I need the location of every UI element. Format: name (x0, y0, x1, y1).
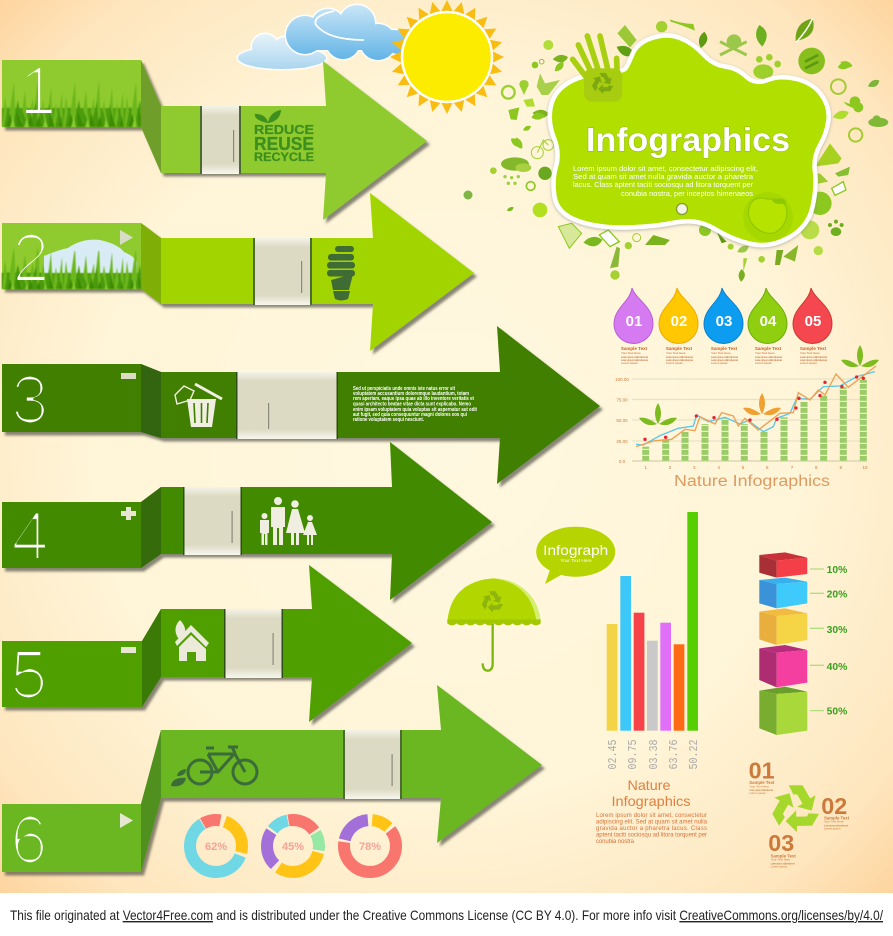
drop 03: Lorem ipsum dolor sit amet (711, 358, 738, 362)
arrow 1 body (2, 60, 427, 220)
number 03 (768, 830, 796, 868)
drop 02: Your Text Here (666, 351, 686, 355)
number 3: 3 (11, 362, 49, 438)
cloud: light (238, 34, 326, 69)
donut 78% (344, 820, 396, 872)
marker plus (121, 507, 136, 520)
number 02: 02 (821, 793, 847, 819)
bar chart title: Nature (628, 777, 671, 793)
icon: reduce reuse recycle (254, 110, 314, 164)
chart lines and points (636, 366, 876, 447)
number 4: 4 (11, 498, 49, 574)
blob body text (573, 164, 758, 198)
arrow 3 text: rem aperiam, eaque ipsa quae ab illo inventore veritatis et (353, 396, 474, 402)
arrow 2 grass panel (2, 243, 141, 289)
chart leaves green right (841, 345, 879, 367)
cube labels: 40% (827, 662, 847, 673)
number 03: Your Text Here (771, 858, 791, 862)
marker triangle (120, 813, 133, 828)
arrow 3 text: Sed ut perspiciatis unde omnis iste natus error sit (353, 386, 455, 392)
number 2: 2 (12, 220, 50, 296)
number 02: Lorem ipsum (824, 826, 841, 830)
drop 03: Your Text Here (711, 351, 731, 355)
number 03: Lorem ipsum dolor sit amet (771, 861, 795, 865)
cube 10% (759, 552, 807, 578)
drop 04 (748, 288, 787, 365)
vertical bar chart (606, 512, 701, 770)
chart x axis labels: 7 (791, 465, 794, 470)
marker minus (121, 373, 136, 379)
drop 05 (793, 288, 832, 365)
bar chart body text: Lorem ipsum dolor sit amet, consectetur (596, 813, 707, 819)
cloud: blue (286, 5, 410, 60)
chart x axis labels: 10 (862, 465, 868, 470)
arrow 1 (2, 53, 427, 220)
drop 01: Lorem ipsum dolor sit amet (621, 355, 648, 359)
drop 01: Your Text Here (621, 351, 641, 355)
arrow 3 text: voluptatem accusantium doloremque laudantium, totam (353, 391, 469, 397)
footer credit: This file originated at Vector4Free.com and is distributed under the Creative Commons License (CC BY 4.0). For more info visit CreativeCommons.org/licenses/by/4.0/ (10, 907, 883, 923)
drop 01: Lorem ipsum (621, 361, 638, 365)
arrow 3 text: quasi architecto beatae vitae dicta sunt explicabo. Nemo (353, 402, 471, 408)
sun (383, 0, 511, 121)
number 01: Lorem ipsum (749, 791, 766, 795)
drop 03: Lorem ipsum dolor sit amet (711, 355, 738, 359)
drop 02: Sample Text (666, 346, 693, 351)
panel cloud (44, 240, 137, 275)
drop 02 (659, 288, 698, 365)
arrow 4 body (2, 442, 492, 600)
cube 40% (759, 645, 807, 687)
arrow 4 (2, 442, 492, 600)
bar chart title: Infographics (612, 793, 690, 809)
footer credit (0, 893, 893, 936)
drop 04: Sample Text (755, 346, 782, 351)
drop 03: Sample Text (711, 346, 738, 351)
icon: trash (175, 384, 222, 427)
chart y axis labels: 0.0 (619, 459, 626, 464)
drop 05: Lorem ipsum dolor sit amet (800, 355, 827, 359)
arrow 3 text: aut fugit, sed quia consequuntur magni dolores eos qui (353, 412, 468, 418)
drop 04: Lorem ipsum dolor sit amet (755, 355, 782, 359)
drop 03: Lorem ipsum (711, 361, 728, 365)
icon: house (175, 620, 209, 661)
icon: apple (743, 192, 793, 242)
donut 62%: 62% (205, 841, 227, 853)
icon: family (260, 497, 317, 545)
bar value labels: 50.22 (687, 740, 701, 770)
small dot icon (464, 190, 472, 200)
teardrop list (614, 288, 832, 365)
bar value labels: 02.45 (606, 740, 620, 770)
donut charts (180, 810, 396, 882)
blob body text: conubia nostra, per inceptos himenaeos (621, 189, 753, 198)
drop 01: Sample Text (621, 346, 648, 351)
speech bubble: Your Text Here (560, 558, 592, 564)
bar value labels: 09.75 (626, 740, 640, 770)
number 01: Lorem ipsum dolor sit amet (749, 788, 773, 792)
arrow 3 text: ratione voluptatem sequi nesciunt. (353, 417, 425, 423)
drop 05: Your Text Here (800, 351, 820, 355)
number 03: 03 (768, 830, 794, 856)
chart y axis labels: 50.00 (616, 418, 628, 423)
cube 30% (759, 608, 807, 645)
arrow 6 body (2, 685, 542, 872)
icon: reduce reuse recycle: REDUCE (254, 123, 314, 137)
chart x axis labels: 8 (815, 465, 818, 470)
arrow 5 body (2, 565, 412, 722)
icon: recycle (766, 785, 819, 837)
chart x axis labels: 6 (766, 465, 769, 470)
number 02: Your Text Here (824, 820, 844, 824)
chart y axis labels: 25.00 (616, 439, 628, 444)
bar chart body text: adipiscing elit. Sed at quam sit amet nulla (596, 820, 708, 826)
blob body text: Lorem ipsum dolor sit amet, consectetur adipiscing elit, (573, 164, 758, 173)
bar chart body text: aptent taciti sociosqu ad litora torquent per (596, 832, 707, 838)
number 6: 6 (10, 802, 48, 878)
chart x axis labels: 5 (742, 465, 745, 470)
donut 78%: 78% (359, 841, 381, 853)
cube labels: 20% (827, 589, 847, 600)
chart y axis labels: 100.00 (615, 377, 629, 382)
cube labels: 30% (827, 625, 847, 636)
title text: Infographics (586, 121, 790, 158)
donut 45% (263, 816, 323, 876)
drop 01: 01 (626, 313, 642, 330)
bar value labels: 03.38 (647, 740, 661, 770)
chart x axis labels: 1 (644, 465, 647, 470)
icon ring around blob (490, 18, 888, 282)
blob shape (550, 36, 829, 245)
drop 05: Lorem ipsum dolor sit amet (800, 358, 827, 362)
arrow 1 slider (200, 106, 241, 174)
arrow 2 body (2, 193, 474, 351)
number 02: Sample Text (824, 815, 850, 820)
arrow 6 slider (343, 730, 402, 799)
cube labels: 50% (827, 707, 847, 718)
arrow 4 slider (183, 487, 242, 555)
bar value labels: 63.76 (667, 740, 681, 770)
bar chart title (612, 777, 690, 809)
title blob (550, 36, 829, 245)
icon: umbrella (447, 578, 541, 671)
chart x axis labels: 3 (693, 465, 696, 470)
bar value labels (606, 740, 701, 770)
icon: reduce reuse recycle: RECYCLE (254, 150, 314, 164)
chart x axis labels: 2 (669, 465, 672, 470)
drop 03 (704, 288, 743, 365)
cube 20% (759, 578, 807, 608)
bar chart body text: conubia nostra (596, 839, 635, 845)
arrow 6 (2, 685, 542, 878)
drop 05: 05 (805, 313, 821, 330)
line and bar chart (615, 345, 879, 490)
chart x axis labels (644, 465, 868, 470)
arrow 3 slider (236, 372, 338, 439)
chart leaves orange (743, 393, 781, 415)
number 02 (821, 793, 850, 830)
number 1: 1 (19, 53, 57, 129)
blob body text: lacus. Class aptent taciti sociosqu ad litora torquent per (573, 180, 754, 189)
donut 45%: 45% (282, 841, 304, 853)
chart x axis labels: 9 (839, 465, 842, 470)
arrow 3 text: enim ipsam voluptatem quia voluptas sit aspernatur aut odit (353, 407, 477, 413)
arrow 5 (2, 565, 412, 722)
cube labels: 10% (827, 565, 847, 576)
chart x axis labels: 4 (717, 465, 720, 470)
drop 02: Lorem ipsum dolor sit amet (666, 355, 693, 359)
number 03: Sample Text (771, 853, 796, 858)
arrow 3 text (353, 386, 477, 423)
drop 05: Lorem ipsum (800, 361, 818, 365)
bar chart body text: gravida auctor a pharetra lacus. Class (596, 826, 707, 832)
drop 04: 04 (760, 313, 777, 330)
speech bubble: Infograph (543, 542, 608, 558)
icon: bulb (327, 246, 355, 300)
cube 50% (759, 687, 807, 735)
number 5: 5 (10, 637, 48, 713)
chart y axis labels (615, 377, 629, 464)
arrow 2 (2, 193, 474, 351)
drop 01: Lorem ipsum dolor sit amet (621, 358, 648, 362)
chart y axis labels: 75.00 (616, 398, 628, 402)
3D cube stack (759, 552, 847, 735)
drop 04: Your Text Here (755, 351, 775, 355)
chart title: Nature Infographics (674, 473, 830, 490)
arrow 3 body (2, 326, 600, 484)
drop 02: 02 (671, 313, 687, 330)
drop 02: Lorem ipsum (666, 361, 684, 365)
drop 01 (614, 288, 653, 365)
number 01: Your Text Here (749, 784, 769, 788)
icon: reduce reuse recycle: REUSE (254, 134, 314, 154)
bar chart body text (596, 813, 708, 845)
icon: bicycle (171, 747, 257, 786)
arrow 2 slider (253, 238, 312, 305)
drop 04: Lorem ipsum (755, 361, 772, 365)
drop 02: Lorem ipsum dolor sit amet (666, 358, 693, 362)
chart leaves green left (639, 403, 677, 425)
number 02: Lorem ipsum dolor sit amet (824, 823, 848, 827)
drop 04: Lorem ipsum dolor sit amet (755, 358, 782, 362)
number 01 (749, 757, 775, 795)
button (676, 204, 688, 214)
donut 62% (180, 810, 252, 882)
arrow 1 grass panel (2, 78, 141, 127)
arrow 5 slider (224, 609, 283, 678)
chart bars (642, 380, 867, 461)
marker triangle (120, 230, 133, 245)
number 01: Sample Text (749, 780, 775, 785)
arrow 3 (2, 326, 600, 484)
drop 03: 03 (716, 313, 732, 330)
icon: hand with recycle (573, 36, 622, 102)
blob body text: Sed at quam sit amet nulla gravida auctor a pharetra (573, 172, 754, 181)
speech bubble (536, 527, 615, 584)
number 03: Lorem ipsum (771, 864, 788, 868)
drop 05: Sample Text (800, 346, 827, 351)
marker minus (121, 647, 136, 653)
recycle numbered list (749, 757, 850, 868)
cube labels (810, 565, 847, 718)
number 01: 01 (749, 757, 775, 783)
